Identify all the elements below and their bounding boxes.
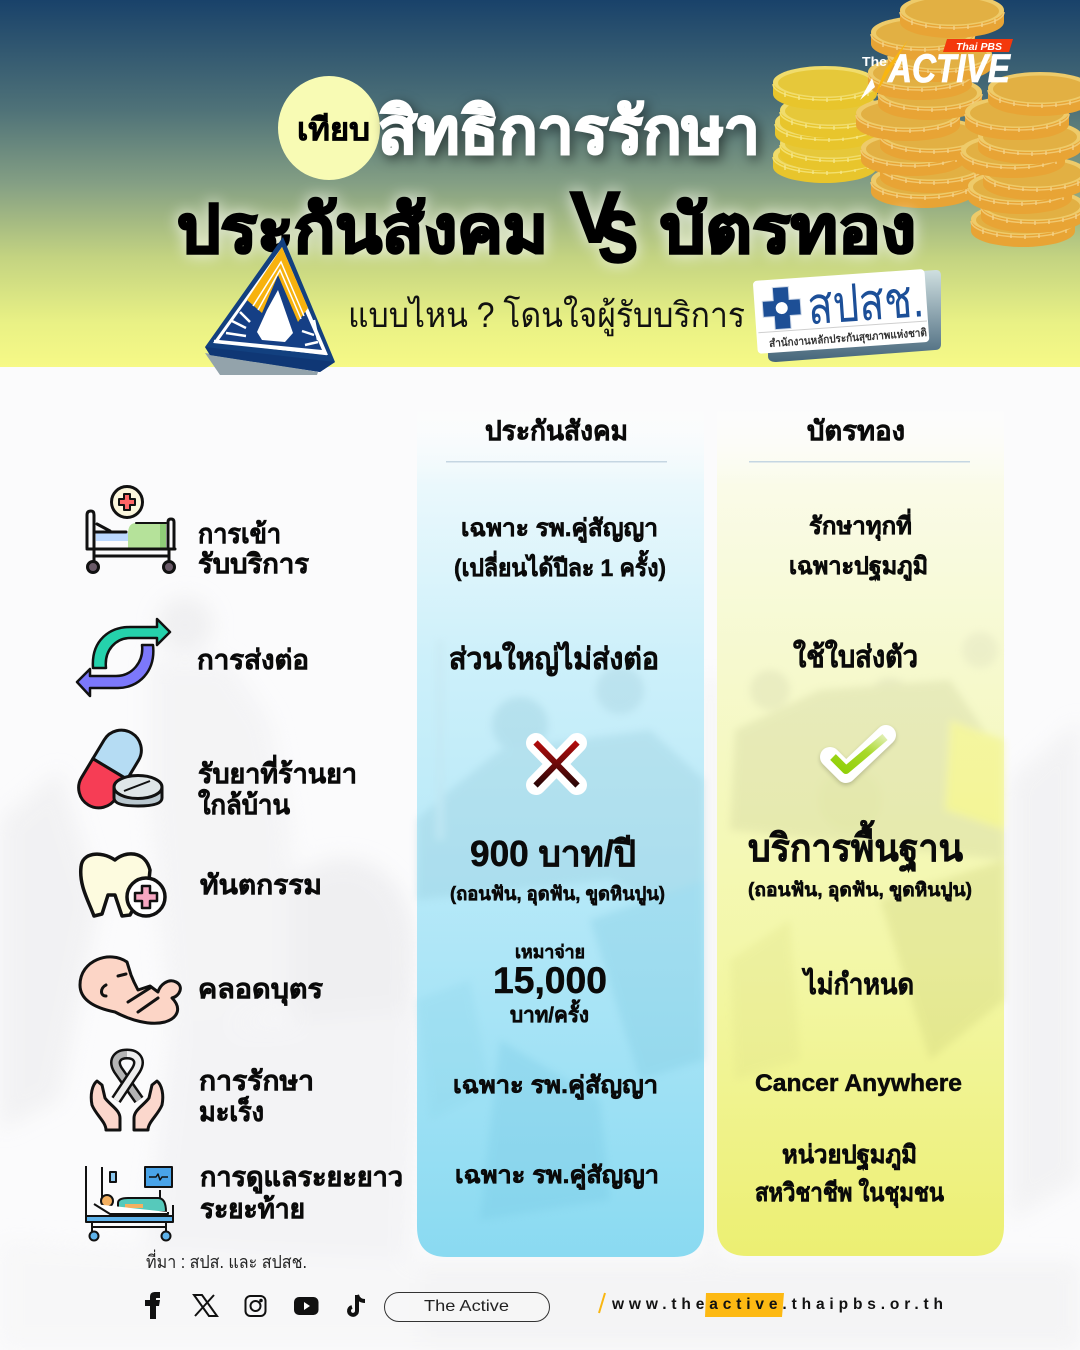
panel: gold card column xyxy=(717,400,1004,1256)
icon: pill and tablet xyxy=(71,723,162,815)
label: การเข้ารับบริการ xyxy=(198,519,310,579)
label: รับยาที่ร้านยาใกล้บ้าน xyxy=(198,754,357,820)
title line 2: ประกันสังคม xyxy=(177,192,548,266)
button: The Active xyxy=(384,1292,550,1322)
compare badge: เทียบ: เทียบ xyxy=(297,112,370,147)
row text: long-term care xyxy=(455,1141,944,1209)
label: การดูแลระยะยาวระยะท้าย xyxy=(200,1162,403,1224)
logo: social security triangle xyxy=(205,237,335,375)
logo: NHSO card xyxy=(753,269,941,362)
row text: cancer: Cancer Anywhere xyxy=(755,1070,962,1097)
label: รับยาที่ร้านยาใกล้บ้าน: ใกล้บ้าน xyxy=(198,789,291,820)
button: The Active: The Active xyxy=(424,1298,509,1315)
label: การรักษามะเร็ง: การรักษา xyxy=(199,1066,314,1096)
subtitle: แบบไหน ? โดนใจผู้รับบริการ xyxy=(348,295,745,336)
row text: admission xyxy=(454,508,928,582)
icon: ribbon in hands xyxy=(91,1054,163,1130)
icon: newborn baby xyxy=(80,957,180,1023)
row text: childbirth: เหมาจ่าย xyxy=(515,942,585,962)
label: รับยาที่ร้านยาใกล้บ้าน: รับยาที่ร้านยา xyxy=(198,754,357,789)
icon: green check mark xyxy=(830,735,886,773)
website url: www.theactive.thaipbs.or.th xyxy=(611,1296,943,1313)
logo: NHSO card: สำนักงานหลักประกันสุขภาพแห่งชาติ xyxy=(769,326,927,351)
row text: long-term care: เฉพาะ รพ.คู่สัญญา xyxy=(455,1162,659,1190)
compare badge: เทียบ xyxy=(278,76,380,180)
logo: The Active: ACTIVE xyxy=(887,47,1011,91)
row text: dental: (ถอนฟัน, อุดฟัน, ขูดหินปูน) xyxy=(748,880,972,902)
icon: tooth with plus xyxy=(81,854,165,916)
title line 2: บัตรทอง xyxy=(660,192,916,266)
label: การเข้ารับบริการ: การเข้า xyxy=(198,519,281,549)
row text: childbirth: ไม่กำหนด xyxy=(801,967,914,1001)
panel: social security column xyxy=(417,400,704,1257)
label: การดูแลระยะยาวระยะท้าย: ระยะท้าย xyxy=(200,1194,305,1224)
icon: patient with monitor xyxy=(86,1166,173,1240)
icon: X xyxy=(194,1295,217,1316)
column heading: บัตรทอง: บัตรทอง xyxy=(807,416,905,446)
row text: admission: รักษาทุกที่ xyxy=(809,508,912,542)
row text: admission: (เปลี่ยนได้ปีละ 1 ครั้ง) xyxy=(454,549,666,582)
label: คลอดบุตร: คลอดบุตร xyxy=(198,974,324,1006)
icon: referral arrows xyxy=(77,619,170,696)
row text: long-term care: หน่วยปฐมภูมิ xyxy=(782,1141,917,1171)
row text: admission: เฉพาะ รพ.คู่สัญญา xyxy=(461,515,658,543)
icon: red cross mark xyxy=(536,742,578,786)
row text: dental xyxy=(450,820,972,906)
label: การเข้ารับบริการ: รับบริการ xyxy=(198,549,310,579)
row text: dental: 900 บาท/ปี xyxy=(470,833,636,874)
label: ทันตกรรม: ทันตกรรม xyxy=(200,870,322,900)
logo: The Active: Thai PBS xyxy=(956,42,1002,53)
gold coin stacks xyxy=(773,0,1080,247)
icon: facebook xyxy=(145,1292,160,1319)
label: การรักษามะเร็ง: มะเร็ง xyxy=(199,1094,264,1127)
title line 1: สิทธิการรักษา xyxy=(378,95,760,167)
label: การรักษามะเร็ง xyxy=(199,1066,314,1127)
row text: referral: ใช้ใบส่งตัว xyxy=(793,639,918,674)
row text: childbirth: 15,000 xyxy=(493,960,607,1001)
icon: tiktok xyxy=(349,1295,365,1315)
icon: instagram xyxy=(246,1296,266,1316)
title line 2 xyxy=(177,177,916,283)
website url xyxy=(599,1293,943,1317)
row text: childbirth xyxy=(493,942,914,1027)
row text: dental: (ถอนฟัน, อุดฟัน, ขูดหินปูน) xyxy=(450,884,665,906)
row text: childbirth: บาท/ครั้ง xyxy=(510,999,589,1027)
logo: The Active: The xyxy=(862,54,887,69)
logo: The Active xyxy=(860,39,1013,100)
title line 2: s xyxy=(597,177,639,283)
row text: referral: ส่วนใหญ่ไม่ส่งต่อ xyxy=(449,641,659,677)
row text: referral xyxy=(449,639,918,677)
logo: NHSO card: สปสช. xyxy=(806,270,925,336)
label: การส่งต่อ: การส่งต่อ xyxy=(197,645,309,675)
icon: hospital bed xyxy=(87,486,175,572)
column heading: ประกันสังคม: ประกันสังคม xyxy=(485,416,628,446)
icon: youtube xyxy=(294,1297,318,1315)
row text: long-term care: สหวิชาชีพ ในชุมชน xyxy=(755,1177,944,1209)
row text: admission: เฉพาะปฐมภูมิ xyxy=(789,553,928,582)
header gradient band xyxy=(0,0,1080,367)
source note: ที่มา : สปส. และ สปสช. xyxy=(146,1249,307,1272)
row text: cancer: เฉพาะ รพ.คู่สัญญา xyxy=(453,1072,658,1100)
title line 2: V xyxy=(570,178,620,258)
row text: dental: บริการพื้นฐาน xyxy=(748,820,963,873)
row text: cancer xyxy=(453,1070,962,1100)
label: การดูแลระยะยาวระยะท้าย: การดูแลระยะยาว xyxy=(200,1162,403,1194)
